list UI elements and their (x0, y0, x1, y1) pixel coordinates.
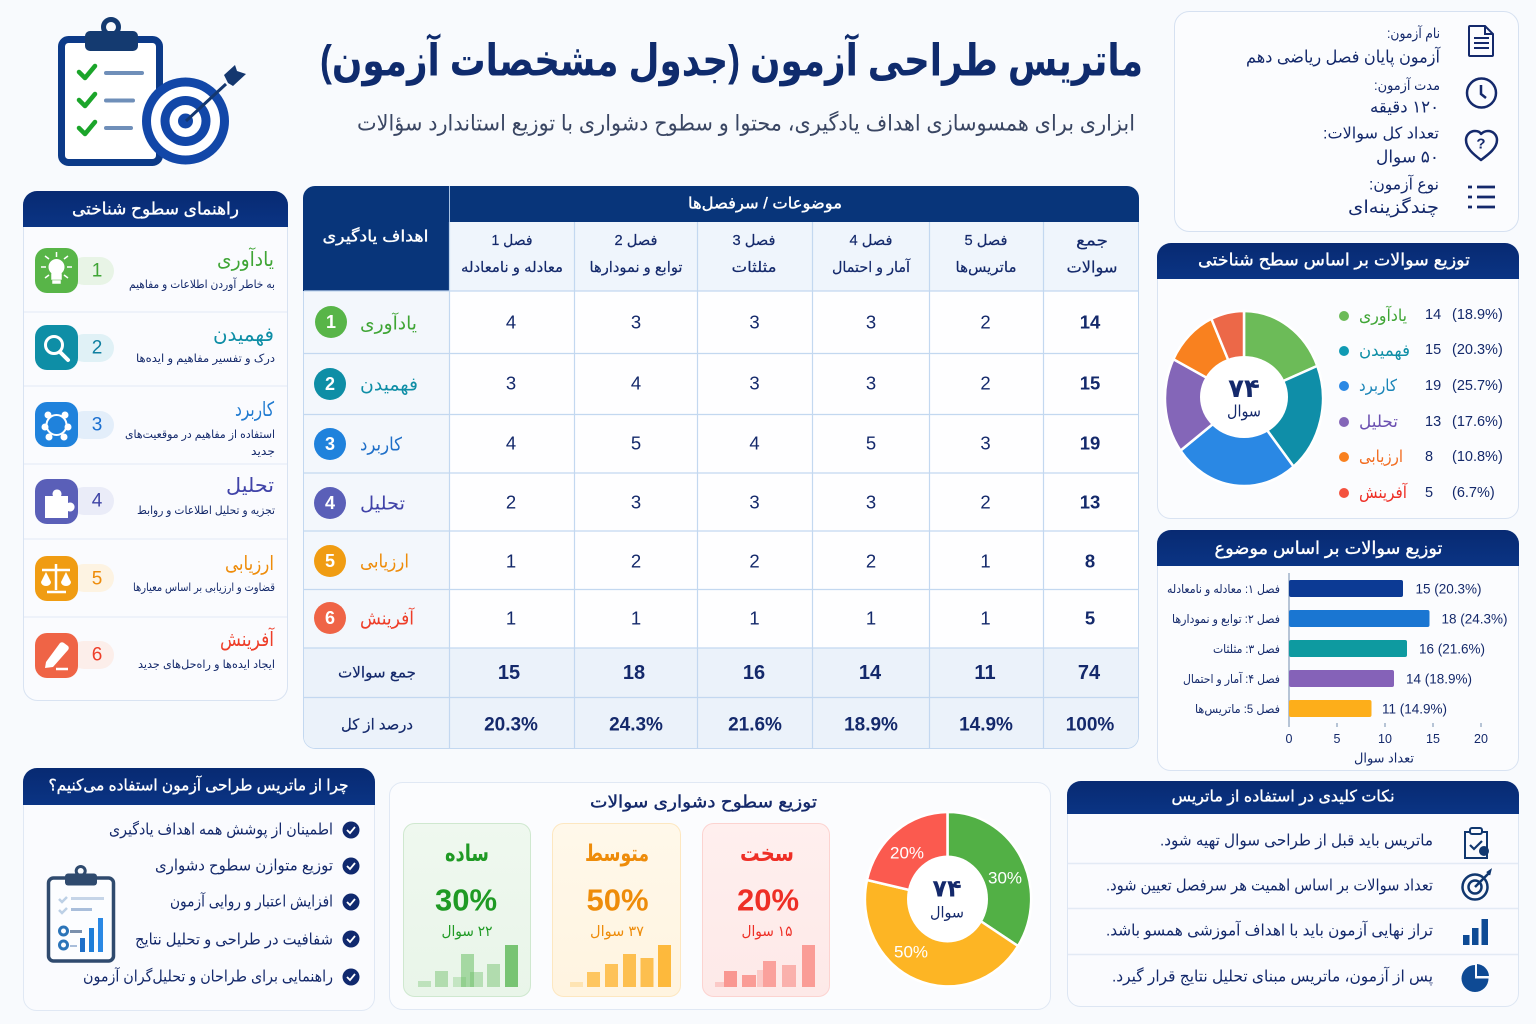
table values: 3 (749, 372, 760, 394)
level 2: 2 (92, 338, 102, 358)
card: medium: ۳۷ سوال (590, 924, 644, 940)
row labels: 6 (325, 608, 335, 628)
card: hard: سخت (740, 840, 794, 866)
card: easy: ۲۲ سوال (442, 924, 493, 940)
exam duration: ۱۲۰ دقیقه (1370, 98, 1439, 116)
row labels: فهمیدن (360, 374, 418, 396)
donut legend: (18.9%) (1452, 307, 1503, 323)
icon: heart question: ? (1476, 136, 1486, 152)
panel: cognitive levels guide (23, 191, 288, 700)
column headings: آمار و احتمال (832, 258, 911, 276)
heading: cognitive guide (23, 191, 288, 227)
bar chart: 18 (24.3%) (1442, 612, 1508, 626)
row labels: آفرینش (360, 606, 415, 630)
exam type: نوع آزمون: (1369, 174, 1439, 194)
level 4: تجزیه و تحلیل اطلاعات و روابط (137, 505, 275, 518)
reasons list (83, 820, 360, 986)
level 4: تحلیل (226, 475, 274, 497)
reasons list: توزیع متوازن سطوح دشواری (155, 858, 333, 876)
icon: heart question (1466, 131, 1497, 160)
table values: 3 (866, 312, 876, 332)
donut legend: تحلیل (1359, 413, 1398, 431)
table values: 100% (1066, 714, 1114, 736)
table values: 20.3% (484, 714, 538, 736)
table values: 2 (980, 372, 991, 394)
bar chart: 11 (14.9%) (1382, 702, 1447, 716)
table values: 3 (749, 492, 760, 512)
icon: document (1469, 26, 1493, 56)
donut legend: ارزیابی (1359, 448, 1403, 467)
clock ring (1467, 78, 1496, 108)
table values: 1 (980, 550, 991, 572)
tips text: ماتریس باید قبل از طراحی سوال تهیه شود. (1160, 832, 1433, 850)
table header (303, 186, 1139, 291)
row labels: 5 (325, 551, 335, 571)
table values: 2 (631, 550, 641, 572)
tips text: تعداد سوالات بر اساس اهمیت هر سرفصل تعیین شود. (1106, 878, 1433, 896)
row labels: تحلیل (360, 492, 405, 514)
heading: cognitive distribution (1157, 243, 1519, 279)
donut legend: 15 (1425, 342, 1441, 358)
difficulty donut: سوال (930, 904, 964, 922)
table values: 3 (980, 432, 991, 454)
panel: matrix table (303, 186, 1139, 749)
table values: 14 (859, 662, 882, 684)
table header: موضوعات / سرفصل‌ها (688, 196, 842, 214)
table values: 2 (866, 550, 876, 572)
table values: 3 (866, 492, 876, 512)
bar chart: تعداد سوال (1354, 750, 1414, 766)
level 1: یادآوری (217, 246, 274, 271)
icon: clipboard with target (62, 20, 246, 164)
icon: clipboard with chart (48, 866, 114, 961)
row labels: یادآوری (360, 312, 417, 334)
row labels: کاربرد (360, 434, 402, 456)
table values: 1 (631, 608, 641, 628)
bar chart: فصل ۲: توابع و نمودارها (1172, 612, 1280, 627)
donut legend: 5 (1425, 485, 1433, 501)
table values: 5 (866, 432, 876, 454)
difficulty donut: 20% (890, 844, 924, 862)
donut legend: کاربرد (1359, 377, 1397, 396)
icon: list (1468, 187, 1495, 207)
reasons list: شفافیت در طراحی و تحلیل نتایج (135, 932, 333, 950)
panel: cognitive distribution donut (1157, 243, 1519, 518)
row labels: جمع سوالات (338, 664, 416, 682)
heading: topic distribution: توزیع سوالات بر اساس موضوع (1214, 538, 1443, 559)
level 1 (35, 246, 275, 293)
donut legend: (20.3%) (1452, 342, 1503, 358)
tips text: پس از آزمون، ماتریس مبنای تحلیل نتایج قرار گیرد. (1112, 966, 1433, 986)
level 3: جدید (251, 446, 275, 458)
table values: 3 (506, 372, 516, 394)
donut legend: (10.8%) (1452, 449, 1503, 465)
table values: 15 (1080, 372, 1100, 394)
exam duration: مدت آزمون: (1374, 77, 1440, 94)
column headings: فصل 1 (492, 233, 532, 249)
row labels: 2 (325, 374, 335, 394)
card: hard: ۱۵ سوال (742, 924, 793, 940)
donut chart: سوال (1227, 404, 1261, 422)
exam type: چندگزینه‌ای (1348, 196, 1439, 218)
table values: 18.9% (844, 714, 898, 736)
exam name: نام آزمون: (1387, 25, 1440, 42)
table values: 1 (506, 608, 516, 628)
heading: topic distribution (1157, 530, 1519, 566)
table values: 1 (749, 608, 760, 628)
donut legend: 13 (1425, 414, 1441, 430)
table values: 5 (631, 432, 641, 454)
icon: clock (1481, 85, 1486, 98)
level 6: 6 (92, 644, 102, 666)
row labels: درصد از کل (341, 716, 413, 734)
column headings: توابع و نمودارها (590, 260, 682, 276)
level 6 (35, 626, 275, 678)
column headings: فصل 5 (964, 233, 1008, 249)
bar chart: فصل ۱: معادله و نامعادله (1167, 582, 1280, 597)
donut legend: 19 (1425, 378, 1441, 394)
table values: 3 (631, 312, 641, 332)
heading: difficulty: توزیع سطوح دشواری سوالات (590, 792, 817, 812)
exam type (1348, 174, 1439, 218)
level 3: استفاده از مفاهیم در موقعیت‌های (125, 429, 275, 442)
bar chart: 20 (1474, 732, 1488, 746)
card: medium (552, 824, 680, 996)
table values: 14 (1080, 312, 1101, 332)
column headings: ماتریس‌ها (956, 260, 1016, 276)
table values (484, 312, 1114, 736)
bar chart: 16 (21.6%) (1419, 642, 1485, 656)
donut legend: یادآوری (1359, 306, 1407, 326)
card: medium: 50% (586, 882, 649, 918)
column headings: فصل 3 (732, 233, 776, 249)
level 3: 3 (92, 414, 102, 436)
table values: 11 (974, 662, 996, 684)
donut legend: (6.7%) (1452, 485, 1495, 501)
column headings: فصل 4 (850, 233, 892, 249)
level 1: 1 (92, 260, 102, 282)
column headings (461, 232, 1118, 276)
heading: tips: نکات کلیدی در استفاده از ماتریس (1172, 788, 1394, 806)
bar chart: فصل ۴: آمار و احتمال (1183, 671, 1280, 687)
table values: 5 (1085, 608, 1095, 628)
table values: 2 (749, 550, 760, 572)
donut legend: (25.7%) (1452, 378, 1503, 394)
table values: 4 (506, 432, 516, 454)
card: easy (404, 824, 530, 996)
table values: 24.3% (609, 714, 663, 736)
level 5: 5 (92, 568, 102, 590)
difficulty donut (865, 812, 1031, 986)
table values: 21.6% (728, 714, 782, 736)
question count: تعداد کل سوالات: (1323, 126, 1439, 144)
panel: difficulty distribution (390, 782, 1050, 1010)
icon: pie chart (1462, 964, 1489, 992)
donut legend: (17.6%) (1452, 414, 1503, 430)
level 2: درک و تفسیر مفاهیم و ایده‌ها (136, 352, 275, 366)
tips text (1106, 832, 1433, 986)
icon: target (1462, 871, 1490, 900)
card: medium: متوسط (585, 840, 649, 867)
table values: 1 (506, 550, 516, 572)
table values: 1 (980, 608, 991, 628)
table header: اهداف یادگیری (322, 226, 428, 246)
donut legend: 14 (1425, 307, 1441, 323)
table values: 3 (749, 312, 760, 332)
heading: why: چرا از ماتریس طراحی آزمون استفاده می‌کنیم؟ (48, 776, 348, 796)
donut legend: آفرینش (1359, 483, 1408, 503)
table column backgrounds (304, 222, 1138, 748)
icon: clipboard check (1465, 828, 1488, 858)
row labels: 3 (325, 434, 335, 454)
table values: 16 (743, 662, 765, 684)
table values: 18 (623, 662, 645, 684)
reasons list: افزایش اعتبار و روایی آزمون (170, 892, 333, 912)
exam name: آزمون پایان فصل ریاضی دهم (1246, 46, 1441, 68)
column headings: معادله و نامعادله (461, 260, 563, 276)
level 6: ایجاد ایده‌ها و راه‌حل‌های جدید (138, 659, 275, 672)
bar chart: فصل 5: ماتریس‌ها (1195, 702, 1280, 717)
icon: bar chart (1463, 919, 1488, 945)
bar chart: 15 (1426, 732, 1440, 746)
level 3: کاربرد (235, 399, 274, 421)
level 4: 4 (92, 490, 103, 512)
bar chart: 10 (1378, 732, 1392, 746)
level 5: ارزیابی (225, 553, 274, 575)
table values: 8 (1085, 550, 1095, 572)
card: easy: ساده (445, 840, 489, 866)
table values: 2 (980, 312, 991, 332)
table values: 19 (1080, 432, 1100, 454)
card: hard: 20% (737, 882, 799, 918)
reasons list: راهنمایی برای طراحان و تحلیل‌گران آزمون (83, 966, 333, 986)
panel: key tips (1067, 781, 1519, 1006)
difficulty donut: 30% (988, 868, 1022, 888)
difficulty donut: 50% (894, 942, 928, 962)
bar chart: فصل ۳: مثلثات (1213, 642, 1280, 656)
bar chart: 0 (1286, 732, 1293, 746)
panel: exam info (1174, 12, 1518, 232)
table values: 2 (980, 492, 991, 512)
table values: 14.9% (959, 714, 1013, 736)
table values: 4 (506, 312, 516, 332)
level 6: آفرینش (220, 626, 275, 651)
donut legend: فهمیدن (1359, 342, 1410, 361)
column headings: مثلثات (732, 260, 776, 276)
heading: cognitive distribution: توزیع سوالات بر اساس سطح شناختی (1198, 250, 1470, 270)
donut legend (1339, 306, 1503, 503)
bar chart (1167, 573, 1508, 766)
title: ماتریس طراحی آزمون (جدول مشخصات آزمون) (320, 32, 1143, 86)
donut chart: ۷۴ (1228, 373, 1260, 403)
level 3 (35, 399, 275, 458)
row labels: 1 (326, 312, 336, 332)
level 1: به خاطر آوردن اطلاعات و مفاهیم (129, 277, 275, 292)
level 2 (35, 324, 275, 370)
bar chart: 15 (20.3%) (1416, 582, 1482, 596)
table values: 13 (1080, 492, 1100, 512)
panel: topic distribution bars (1157, 530, 1519, 770)
tips text: تراز نهایی آزمون باید با اهداف آموزشی همسو باشد. (1106, 920, 1433, 940)
table values: 74 (1078, 662, 1101, 684)
table values: 1 (866, 608, 876, 628)
level 5: قضاوت و ارزیابی بر اساس معیارها (133, 582, 275, 595)
heading: why (23, 768, 375, 805)
card: hard (702, 824, 830, 996)
exam duration (1370, 77, 1440, 116)
card: easy: 30% (435, 882, 497, 918)
table values: 3 (631, 492, 641, 512)
row labels: 4 (325, 493, 335, 513)
heading: cognitive guide: راهنمای سطوح شناختی (72, 200, 239, 220)
bar chart: 14 (18.9%) (1406, 672, 1472, 686)
table values: 15 (498, 662, 520, 684)
subtitle: ابزاری برای همسوسازی اهداف یادگیری، محتوا و سطوح دشواری با توزیع استاندارد سؤالات (357, 110, 1135, 136)
level 5 (35, 553, 275, 601)
level 2: فهمیدن (213, 324, 274, 346)
donut chart (1165, 311, 1323, 486)
exam name (1246, 25, 1441, 68)
panel: why use the matrix (23, 768, 375, 1010)
row labels: ارزیابی (360, 550, 409, 572)
table values: 4 (631, 372, 641, 394)
row labels (314, 306, 418, 734)
donut legend: 8 (1425, 449, 1433, 465)
reasons list: اطمینان از پوشش همه اهداف یادگیری (109, 820, 333, 840)
question count: ۵۰ سوال (1376, 148, 1439, 166)
table values: 2 (506, 492, 516, 512)
question count (1323, 126, 1439, 166)
column headings: فصل 2 (614, 233, 658, 249)
table values: 4 (749, 432, 760, 454)
bar chart: 5 (1334, 732, 1341, 746)
table grid (304, 222, 1138, 749)
table values: 3 (866, 372, 876, 394)
level 4 (35, 475, 275, 524)
column headings: سوالات (1066, 260, 1118, 276)
heading: tips (1067, 781, 1519, 814)
difficulty donut: ۷۴ (932, 876, 962, 902)
column headings: جمع (1076, 232, 1108, 250)
